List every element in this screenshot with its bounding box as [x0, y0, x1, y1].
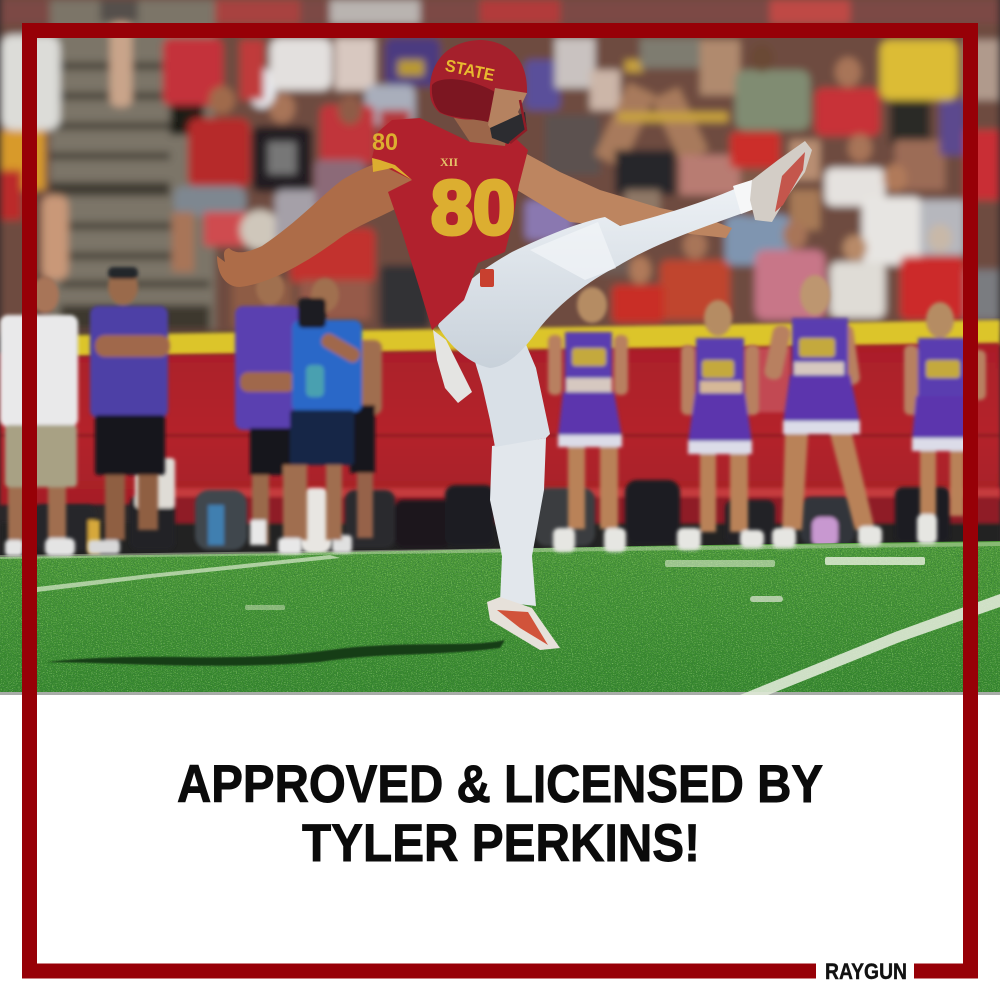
spectators centre and right [525, 38, 1000, 323]
jersey number 80: 80 [431, 166, 515, 251]
headline [177, 755, 823, 873]
kicking leg [438, 178, 765, 368]
sleeve trim [372, 158, 412, 180]
man in white shirt [0, 277, 78, 556]
helmet logo text: STATE [443, 56, 496, 85]
cheerleader 3 [763, 275, 882, 548]
helmet [430, 40, 527, 144]
headline line 2: TYLER PERKINS! [302, 814, 700, 873]
bench [0, 488, 1000, 560]
photographer in blue shirt [278, 278, 363, 554]
kicking cleat [750, 141, 812, 222]
white caption panel [0, 695, 1000, 1000]
cheerleader 4 [904, 302, 986, 544]
photo: stadium background [0, 0, 1000, 695]
headline line 1: APPROVED & LICENSED BY [177, 755, 823, 814]
crowd in the stands [0, 0, 1000, 335]
grass field [0, 541, 1000, 695]
sleeve number: 80 [372, 129, 398, 156]
pants thigh highlight [530, 222, 616, 280]
coach in purple shirt [88, 267, 170, 554]
staff in purple polo [235, 271, 300, 545]
spectators left side [0, 0, 440, 330]
sock band [733, 178, 765, 214]
left arm [217, 159, 414, 287]
jersey [372, 118, 528, 330]
RAYGUN wordmark: RAYGUN [825, 959, 907, 984]
stadium steps [50, 0, 215, 330]
face and mask [488, 88, 527, 142]
dark backing behind the sideline [0, 0, 1000, 560]
red wall [0, 343, 1000, 505]
sideline bags [35, 458, 950, 554]
yellow wall cap [75, 320, 1000, 357]
towel [433, 330, 472, 403]
standing thigh pants [472, 335, 550, 447]
person behind in dark shorts [332, 340, 382, 553]
pants logo [480, 269, 494, 287]
cheerleader 1 [548, 287, 628, 552]
cheerleaders [548, 275, 986, 552]
conference patch: XII [440, 155, 458, 169]
sideline staff [0, 267, 382, 556]
field lines [0, 542, 1000, 695]
standing leg sock [490, 438, 546, 606]
neck [452, 115, 510, 146]
cheerleader 2 [677, 300, 764, 550]
punter in red jersey [217, 40, 812, 650]
right arm [517, 153, 732, 238]
player shadow on grass [45, 640, 505, 666]
planted cleat [487, 597, 560, 650]
